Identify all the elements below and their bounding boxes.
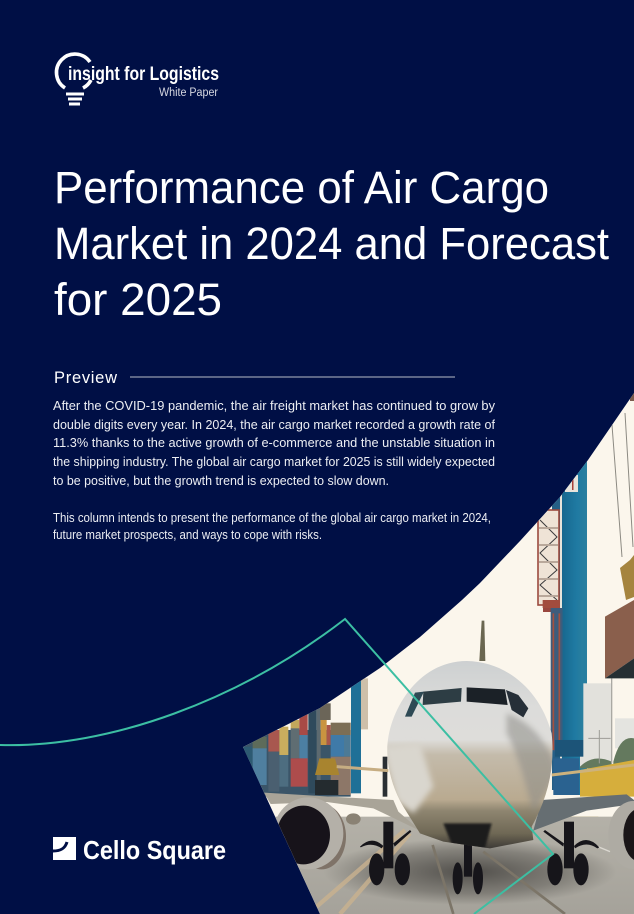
preview paragraph 1 [53,398,496,488]
right wing [533,794,634,831]
hanging cables and load [612,393,634,600]
preview paragraph 2: This column intends to present the performance of the global air cargo market in 2024, [53,510,491,525]
left engine [273,797,361,869]
distant buildings and trees [580,678,634,768]
title [54,162,609,325]
preview paragraph 1: 11.3% thanks to the active growth of e-commerce and the unstable situation in [53,435,495,450]
yellow barrier [552,760,634,817]
fuselage nose [383,661,557,848]
icon: light bulb [56,54,91,104]
tail fin [479,621,485,661]
right crane upper section [538,455,587,795]
title: for 2025 [54,274,222,325]
logo: insight for Logistics: insight for Logistics [68,64,219,85]
photo: airplane at cargo terminal [240,390,634,914]
teal accent line [0,619,553,914]
preview paragraph 1: After the COVID-19 pandemic, the air freight market has continued to grow by [53,398,496,413]
title: Market in 2024 and Forecast [54,218,609,269]
upper right container [605,600,634,678]
logo: insight for Logistics: White Paper [159,87,218,99]
runway markings [317,830,610,914]
title: Performance of Air Cargo [54,162,549,213]
right engine [612,801,634,860]
preview paragraph 1: double digits every year. In 2024, the air cargo market recorded a growth rate of [53,417,495,432]
preview heading: Preview [54,369,117,387]
preview paragraph 2 [53,510,491,542]
container stacks [243,703,388,797]
ground shadow under aircraft [334,841,606,902]
preview paragraph 1: the shipping industry. The global air cargo market for 2025 is still widely expected [53,454,495,469]
left wing [264,793,422,832]
lower photo scene, drawn in 3x crop coordinates [240,600,634,914]
logo: insight for Logistics [56,54,219,104]
landing gear [360,822,599,894]
left crane [351,678,387,797]
logo: Cello Square: Cello Square [83,835,226,865]
ground [240,817,634,914]
preview paragraph 1: to be positive, but the growth trend is expected to slow down. [53,473,389,488]
right crane lower section [543,600,583,795]
preview paragraph 2: future market prospects, and ways to cope with risks. [53,527,322,542]
soft shading on nose [383,713,557,848]
cockpit windows [405,687,528,717]
icon: square mark [53,837,76,860]
